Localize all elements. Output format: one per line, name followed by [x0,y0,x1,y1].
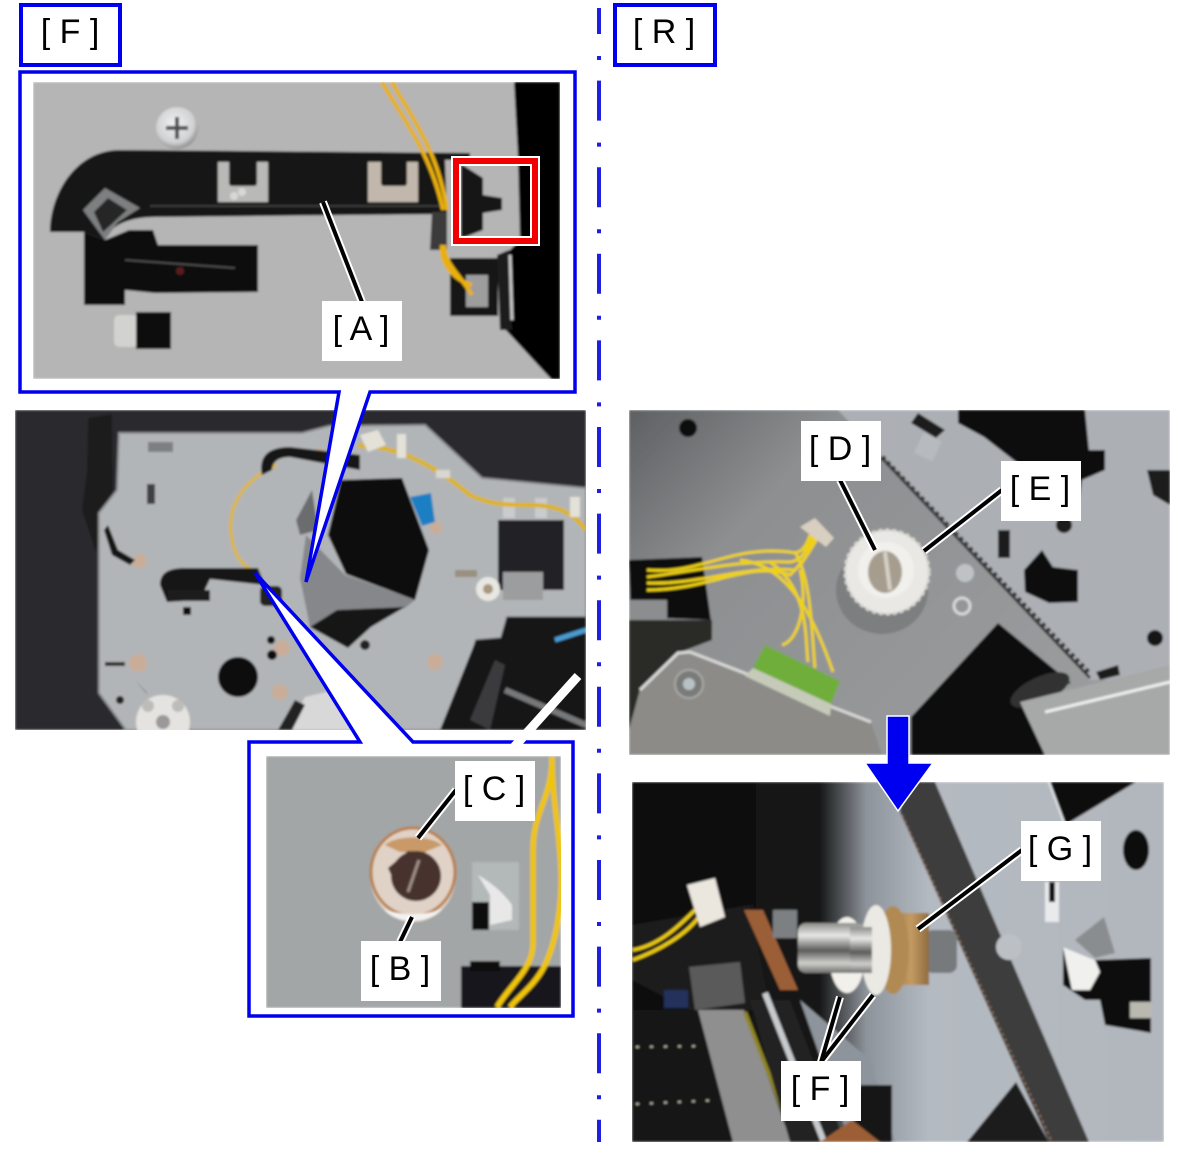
label: [C] [455,761,535,821]
photo: bracket [A] detail [33,82,560,379]
connectors [360,430,386,452]
small tab [114,315,138,347]
slot [472,862,519,930]
heading box: [F] [21,5,120,65]
brass standoff [893,913,929,985]
gear shadow + gear [836,566,928,634]
metal strip [698,1010,791,1142]
clips [503,498,515,518]
standoffs [133,554,147,568]
white washer [861,905,891,995]
sheet metal plate [99,425,586,730]
bracket [A] small [160,568,265,602]
heading box: [R] [615,5,715,65]
lower plate black [967,1082,1049,1142]
wires [647,535,833,672]
gear [135,694,191,730]
white leader to overview [497,676,578,766]
black lower left [632,1010,733,1142]
connector and wire [633,910,698,960]
label: [G]: [ G ] [1028,830,1092,868]
rivet [996,934,1022,960]
label: [B]: [ B ] [370,950,430,988]
gear cutout [1063,947,1151,1033]
motor plate [629,652,882,755]
bracket body [50,150,470,240]
highlight: red box [452,157,539,245]
part inside red box [461,164,502,237]
label: [C]: [ C ] [463,770,525,808]
heading box: [R]: [ R ] [633,13,695,51]
belt [882,457,1089,673]
washer [370,828,456,922]
photo: rear view with gear [629,410,1170,755]
leader line: [C] [418,790,456,838]
belt [900,782,1089,1142]
label: [D]: [ D ] [809,430,871,468]
heading box: [F]: [ F ] [41,13,99,51]
right metal bracket [1020,665,1170,755]
dash-dot divider [597,8,601,1142]
left black part [629,557,711,620]
wedge [83,188,140,240]
bottom connector [461,966,561,1008]
label: [F] lower [781,1061,861,1121]
label: [F] lower: [ F ] [791,1070,849,1108]
rivet [956,564,974,582]
main hole [218,657,258,697]
callout frame: standoff detail [249,573,573,1016]
label: [A]: [ A ] [333,310,389,348]
lower block [84,230,258,305]
photo: standoff detail [266,756,561,1008]
leader lines: [F] [821,995,873,1062]
plate hole [1123,830,1149,870]
leader line: [E] [924,490,1002,551]
label: [G] [1021,821,1101,881]
callout frame: bracket [A] detail [20,72,575,582]
rear shaft [925,930,957,973]
left dark block and gear [632,905,770,1010]
rear window [498,520,564,590]
washers [829,917,865,993]
leader line: [D] [840,480,875,550]
lower-right dark [440,617,586,730]
photo: front overview of frame [15,410,586,749]
right clip [430,212,447,250]
ink cartridge label [410,493,435,526]
silver shaft [798,923,868,973]
black cutouts [956,410,1106,497]
arrow: down [865,716,933,811]
photo: rear view with gear removed [632,782,1164,1142]
yellow wires [497,757,552,1007]
label: [E] [1001,461,1081,521]
windows [218,162,268,202]
connector [800,518,834,547]
right plate [838,410,1170,680]
dark lower-left [629,620,712,730]
label: [B] [361,941,441,1001]
label: [D] [801,421,881,481]
wires [382,82,447,210]
shaft [391,851,441,901]
label: [E]: [ E ] [1010,470,1070,508]
leader line: [A] [323,202,362,302]
black motor [911,623,1071,755]
screw [156,107,198,149]
slot [1045,882,1059,922]
green PCB [753,645,840,704]
leader line: [G] [918,850,1022,929]
label: [A] [322,301,402,361]
leader line: [B] [400,917,412,942]
dark right region [505,82,560,379]
upper bracket [261,447,360,475]
wires [231,465,276,573]
